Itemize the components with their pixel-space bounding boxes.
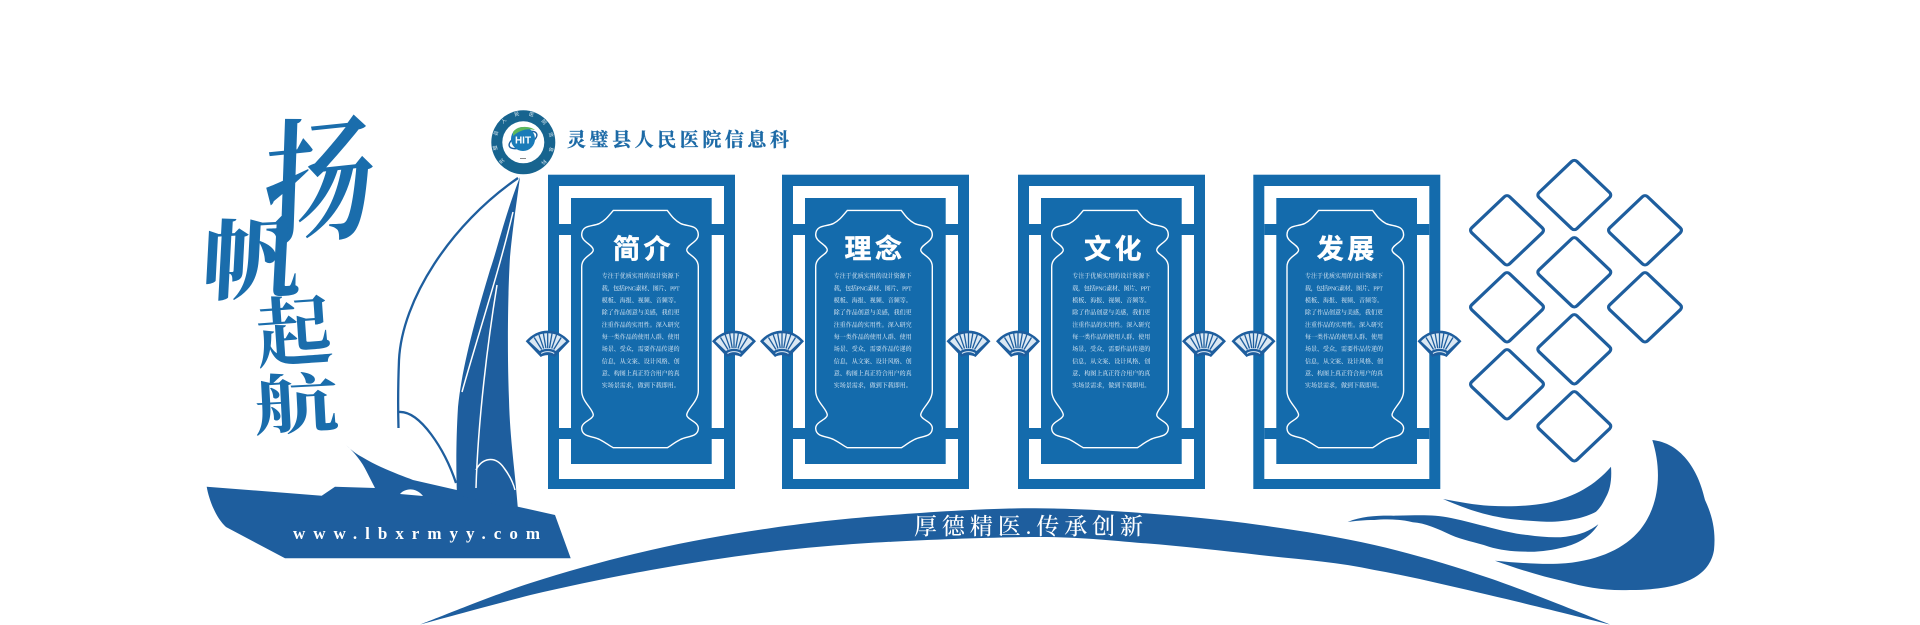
panel body text: 载，包括PNG素材、图片、PPT <box>1305 284 1383 293</box>
panel: 文化 <box>1018 175 1205 489</box>
panel body text: 注重作品的实用性。深入研究 <box>1305 321 1383 329</box>
panel body text: 意、构图上真正符合用户的真 <box>602 370 681 378</box>
panel body text <box>834 272 913 391</box>
sailing ship <box>207 177 571 558</box>
thin jib sail outline <box>398 178 518 483</box>
panel body text: 专注于优质实用的设计资源下 <box>1305 272 1383 280</box>
bottom arc banner <box>420 508 1610 624</box>
diamond photo frames <box>1469 159 1683 462</box>
panel body text: 每一类作品的使用人群、使用 <box>1305 333 1383 341</box>
panel body text <box>1305 272 1384 391</box>
panel body text: 意、构图上真正符合用户的真 <box>834 370 913 378</box>
panel body text: 每一类作品的使用人群、使用 <box>834 333 912 341</box>
hull window <box>400 489 423 496</box>
icon: folding fans between panels <box>526 331 1462 357</box>
calligraphy title: 扬帆起航: 起 <box>253 290 335 379</box>
panel body text: 模板、海报、视频、音频等。 <box>1072 296 1150 304</box>
heading: department name: 灵璧县人民医院信息科 <box>567 129 789 151</box>
panel body text: 载，包括PNG素材、图片、PPT <box>1072 284 1151 293</box>
calligraphy title: 扬帆起航 <box>199 103 378 445</box>
panel body text: 信息，从文案、设计风格、创 <box>1305 357 1383 366</box>
panel body text: 除了作品创意与美感，我们更 <box>1305 309 1383 318</box>
panel body text: 实场景需求，做到下载即用。 <box>602 382 680 391</box>
panel: 发展 <box>1253 175 1440 489</box>
ship hull <box>207 445 571 558</box>
panel body text: 专注于优质实用的设计资源下 <box>1072 272 1150 280</box>
panel: 理念 <box>782 175 969 489</box>
panel body text: 注重作品的实用性。深入研究 <box>834 321 912 329</box>
panel title: 简介 <box>613 235 674 265</box>
panel body text: 信息，从文案、设计风格、创 <box>602 357 680 366</box>
panel body text: 模板、海报、视频、音频等。 <box>1305 296 1383 304</box>
panel body text: 场景、受众，需要作品传递的 <box>602 345 680 354</box>
panel body text: 每一类作品的使用人群、使用 <box>1072 333 1150 341</box>
panel title: 发展 <box>1317 235 1378 265</box>
panel body text <box>602 272 681 391</box>
panel body text: 场景、受众，需要作品传递的 <box>1305 345 1383 354</box>
panel body text: 除了作品创意与美感，我们更 <box>602 309 680 318</box>
panel body text: 注重作品的实用性。深入研究 <box>1072 321 1150 329</box>
panel body text: 意、构图上真正符合用户的真 <box>1305 370 1384 378</box>
panel body text: 实场景需求，做到下载即用。 <box>1305 382 1383 391</box>
decorative waves <box>1348 440 1715 590</box>
website address: www.lbxrmyy.com <box>293 524 540 543</box>
panel body text: 除了作品创意与美感，我们更 <box>1072 309 1150 318</box>
panel body text: 信息，从文案、设计风格、创 <box>834 357 912 366</box>
panel body text: 场景、受众，需要作品传递的 <box>834 345 912 354</box>
calligraphy title: 扬帆起航: 航 <box>251 367 340 445</box>
panel body text: 实场景需求，做到下载即用。 <box>1072 382 1150 391</box>
panel body text: 模板、海报、视频、音频等。 <box>602 296 680 304</box>
slogan: 厚德精医.传承创新 <box>914 514 1143 539</box>
panel body text: 每一类作品的使用人群、使用 <box>602 333 680 341</box>
panel body text: 信息，从文案、设计风格、创 <box>1072 357 1150 366</box>
panel title: 理念 <box>844 234 906 265</box>
panel title: 文化 <box>1084 235 1145 265</box>
panel body text: 模板、海报、视频、音频等。 <box>834 296 912 304</box>
panel body text: 实场景需求，做到下载即用。 <box>834 382 912 391</box>
calligraphy title: 扬帆起航: 帆 <box>199 211 304 314</box>
sail white accents <box>462 212 515 490</box>
hospital logo badge: HIT <box>515 136 531 146</box>
panel body text: 载，包括PNG素材、图片、PPT <box>602 284 680 293</box>
panel body text: 载，包括PNG素材、图片、PPT <box>834 284 912 293</box>
panel body text: 注重作品的实用性。深入研究 <box>602 321 680 329</box>
panel body text: 除了作品创意与美感，我们更 <box>834 309 912 318</box>
panel body text: 专注于优质实用的设计资源下 <box>834 272 912 280</box>
panel body text: 意、构图上真正符合用户的真 <box>1072 370 1151 378</box>
hospital logo badge: 灵璧县人民医院信息科 <box>492 112 554 165</box>
panel body text: 场景、受众，需要作品传递的 <box>1072 345 1150 354</box>
panel: 简介 <box>548 175 735 489</box>
panel body text: 专注于优质实用的设计资源下 <box>602 272 680 280</box>
calligraphy title: 扬帆起航: 扬 <box>261 103 378 265</box>
main sail <box>456 177 520 510</box>
panel body text <box>1072 272 1151 391</box>
